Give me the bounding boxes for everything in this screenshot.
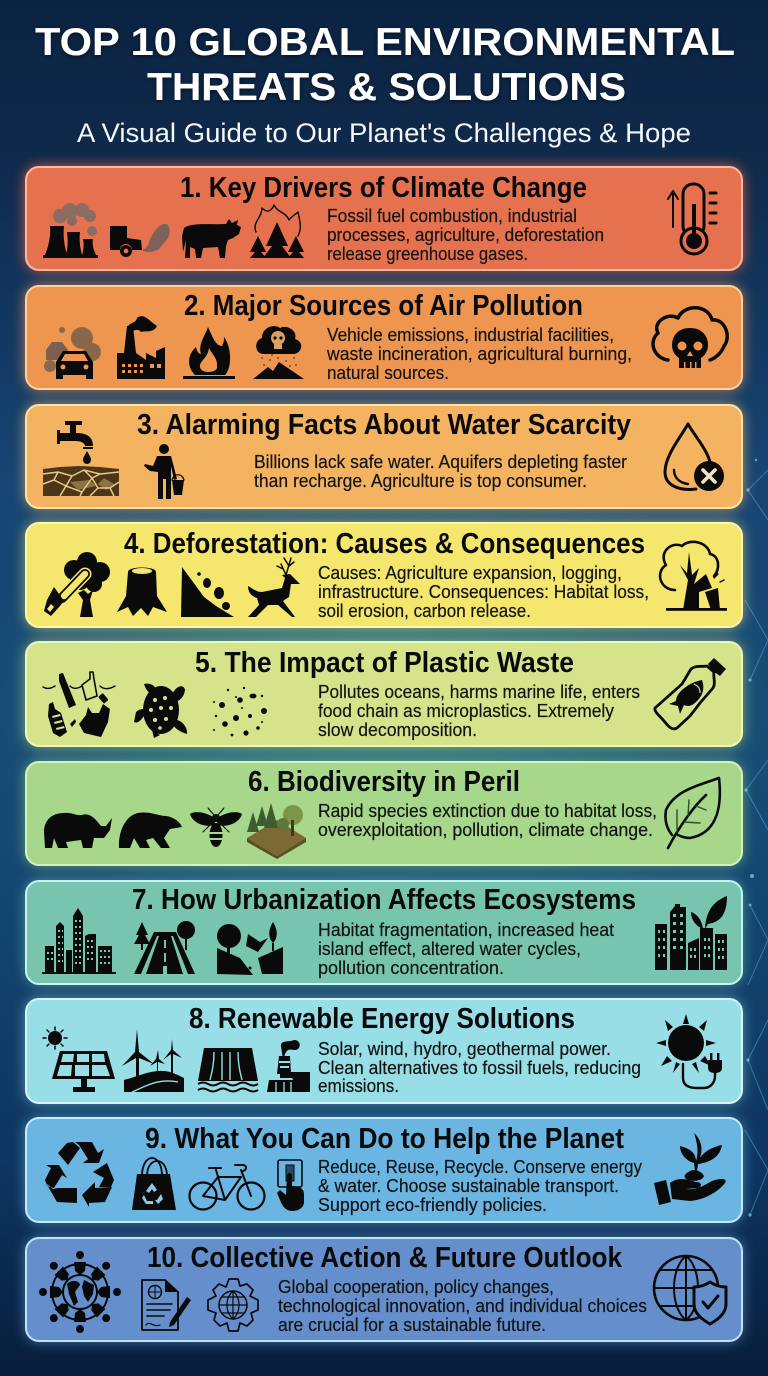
- heading: 1. Key Drivers of Climate Change: [180, 172, 587, 204]
- icon: damaged tree: [660, 542, 727, 611]
- heading: 5. The Impact of Plastic Waste: [195, 647, 574, 679]
- panel 4: deforestation: [26, 523, 742, 627]
- description: Global cooperation, policy changes,: [278, 1277, 554, 1297]
- icon: sun with plug: [656, 1014, 722, 1088]
- description: Fossil fuel combustion, industrial: [327, 206, 577, 226]
- description: food chain as microplastics. Extremely: [318, 701, 614, 721]
- icon: exhaust truck: [110, 224, 170, 257]
- panel 7: urbanization: [26, 881, 742, 984]
- description: Vehicle emissions, industrial facilities,: [327, 325, 614, 345]
- icon: deer: [248, 558, 300, 617]
- icon: bicycle: [190, 1165, 264, 1210]
- icon: hand holding plant: [654, 1133, 726, 1205]
- description: than recharge. Agriculture is top consumer.: [254, 471, 587, 491]
- icon: recycle arrows: [45, 1142, 114, 1207]
- panel 10: collective action: [26, 1238, 742, 1341]
- description: [254, 452, 627, 491]
- icon: car in smog: [44, 327, 101, 379]
- heading: 7. How Urbanization Affects Ecosystems: [132, 884, 636, 916]
- icon: landslide: [181, 567, 234, 617]
- description: [318, 563, 649, 621]
- icon: microplastics: [213, 687, 267, 736]
- title: [35, 21, 735, 109]
- description: waste incineration, agricultural burning,: [326, 344, 632, 364]
- description: Support eco-friendly policies.: [318, 1195, 547, 1215]
- title: THREATS & SOLUTIONS: [147, 66, 626, 109]
- panel 5: plastic waste: [26, 642, 742, 746]
- subtitle: A Visual Guide to Our Planet's Challenges & Hope: [77, 118, 691, 148]
- icon: hydro dam: [198, 1048, 258, 1092]
- description: island effect, altered water cycles,: [318, 939, 581, 959]
- heading: 9. What You Can Do to Help the Planet: [145, 1123, 624, 1155]
- description: Reduce, Reuse, Recycle. Conserve energy: [318, 1157, 642, 1177]
- panel 2: air pollution: [26, 286, 742, 389]
- description: [278, 1277, 647, 1335]
- panel 9: what you can do: [26, 1118, 742, 1222]
- icon: green city: [655, 896, 727, 970]
- heading: 3. Alarming Facts About Water Scarcity: [137, 409, 631, 441]
- icon: tree stump: [117, 568, 167, 616]
- icon: toxic cloud skull: [653, 308, 727, 368]
- icon: geothermal plant: [267, 1040, 310, 1092]
- icon: skyline: [42, 908, 116, 974]
- description: [318, 682, 640, 740]
- icon: signed policy document: [142, 1280, 191, 1330]
- icon: fish in bottle: [655, 658, 726, 729]
- icon: gear globe: [208, 1279, 258, 1331]
- description: infrastructure. Consequences: Habitat loss,: [318, 582, 649, 602]
- description: natural sources.: [327, 363, 449, 383]
- icon: rhino: [44, 813, 112, 848]
- description: release greenhouse gases.: [327, 244, 528, 264]
- description: overexploitation, pollution, climate change.: [318, 820, 653, 840]
- description: Clean alternatives to fossil fuels, reducing: [318, 1058, 641, 1078]
- heading: 2. Major Sources of Air Pollution: [184, 290, 583, 322]
- icon: sun and solar panel: [43, 1027, 115, 1092]
- icon: plastic litter in water: [43, 672, 115, 737]
- description: [318, 1157, 642, 1215]
- icon: water drop with x: [665, 424, 724, 491]
- description: & water. Choose sustainable transport.: [318, 1176, 619, 1196]
- panel 3: water scarcity: [26, 405, 742, 508]
- description: [318, 1039, 641, 1096]
- title: TOP 10 GLOBAL ENVIRONMENTAL: [35, 21, 735, 64]
- icon: dripping tap: [57, 421, 93, 464]
- icon: wind turbines: [122, 1029, 184, 1092]
- description: pollution concentration.: [318, 958, 504, 978]
- description: technological innovation, and individual choices: [278, 1296, 647, 1316]
- icon: forest fire: [250, 205, 304, 258]
- description: [318, 920, 614, 978]
- description: Habitat fragmentation, increased heat: [318, 920, 614, 940]
- description: are crucial for a sustainable future.: [278, 1315, 546, 1335]
- icon: person with bucket: [144, 444, 184, 499]
- icon: forest plot: [247, 803, 306, 859]
- panel 8: renewable energy: [26, 999, 742, 1103]
- icon: flame: [183, 327, 235, 379]
- icon: bee: [190, 808, 242, 847]
- icon: thermometer rising: [668, 184, 716, 254]
- description: Billions lack safe water. Aquifers depleting faster: [254, 452, 627, 472]
- icon: leaf: [665, 778, 720, 848]
- description: [318, 801, 657, 840]
- icon: sea turtle: [134, 684, 187, 738]
- icon: chainsaw and tree: [44, 552, 110, 617]
- icon: recycling bag: [132, 1158, 176, 1210]
- icon: road through trees: [134, 921, 195, 974]
- panel 1: climate change: [26, 167, 742, 270]
- description: [327, 206, 604, 264]
- description: [326, 325, 632, 383]
- description: Causes: Agriculture expansion, logging,: [318, 563, 622, 583]
- panel 6: biodiversity: [26, 762, 742, 865]
- icon: volcanic toxic cloud: [253, 326, 304, 379]
- description: emissions.: [318, 1076, 399, 1096]
- description: soil erosion, carbon release.: [318, 601, 531, 621]
- icon: cracked earth: [43, 466, 119, 496]
- heading: 10. Collective Action & Future Outlook: [147, 1242, 623, 1274]
- icon: globe with shield: [654, 1256, 726, 1324]
- heading: 8. Renewable Energy Solutions: [189, 1003, 575, 1035]
- icon: people around globe: [39, 1251, 121, 1333]
- heading: 4. Deforestation: Causes & Consequences: [124, 528, 645, 560]
- icon: factory: [117, 316, 165, 379]
- icon: light switch and hand: [277, 1160, 304, 1211]
- description: slow decomposition.: [318, 720, 477, 740]
- icon: bear: [119, 813, 182, 848]
- description: Rapid species extinction due to habitat loss,: [318, 801, 657, 821]
- icon: power plant with smoke: [43, 203, 98, 258]
- description: processes, agriculture, deforestation: [327, 225, 604, 245]
- description: Solar, wind, hydro, geothermal power.: [318, 1039, 611, 1059]
- icon: fragmented river landscape: [217, 922, 283, 975]
- heading: 6. Biodiversity in Peril: [248, 766, 520, 798]
- description: Pollutes oceans, harms marine life, enters: [318, 682, 640, 702]
- icon: cow: [182, 219, 241, 258]
